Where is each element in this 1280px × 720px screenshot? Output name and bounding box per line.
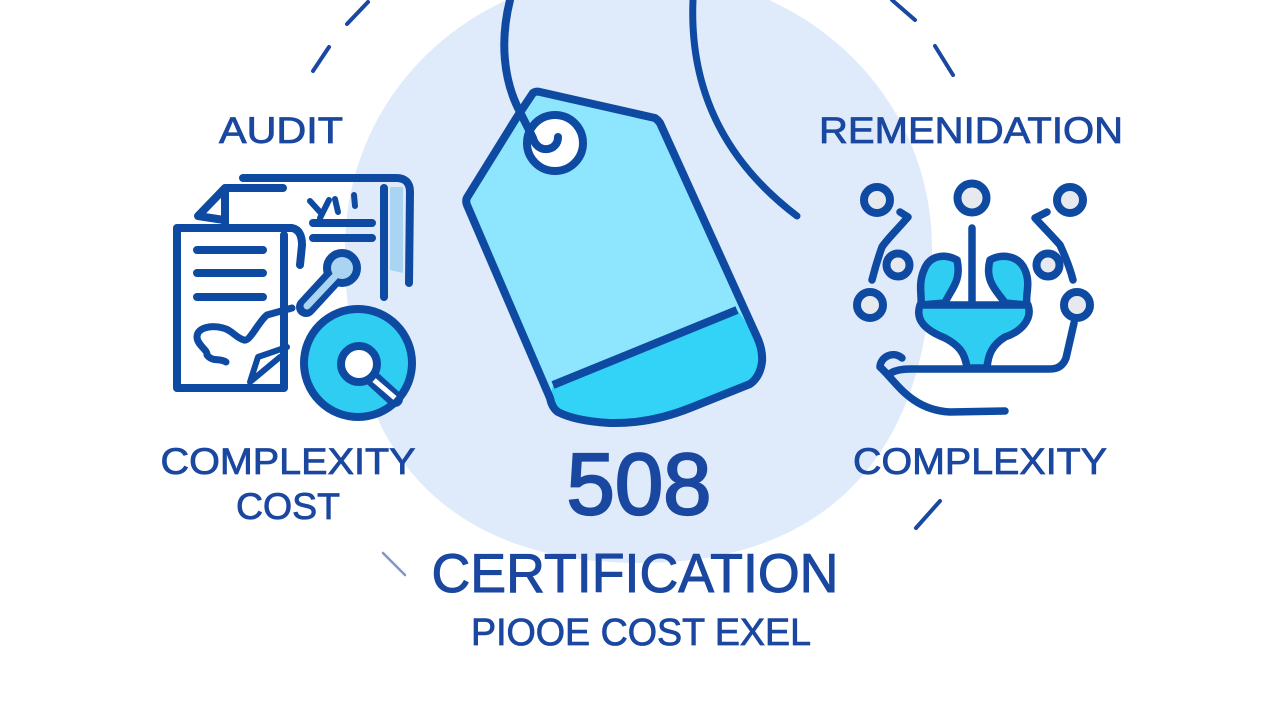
right wrench jaw xyxy=(989,256,1028,305)
back page xyxy=(243,178,410,297)
heading: certification: CERTIFICATION xyxy=(432,542,838,604)
curved cord xyxy=(693,0,797,216)
back page scribble xyxy=(310,195,355,218)
icon: audit documents xyxy=(177,178,410,388)
supporting hand xyxy=(880,355,1005,412)
tag band line xyxy=(553,310,737,385)
tag eyelet xyxy=(527,115,583,171)
wrench base xyxy=(919,305,1029,368)
icon: magnifier disc xyxy=(304,309,412,417)
tag body xyxy=(466,92,762,423)
tag lower band xyxy=(550,310,762,423)
label: complexity cost: COMPLEXITY xyxy=(160,441,416,482)
label: complexity: COMPLEXITY xyxy=(853,441,1107,482)
price tag xyxy=(466,0,762,423)
icon: remediation network xyxy=(857,184,1090,412)
subheading: PIOOE COST EXEL xyxy=(471,612,811,654)
tag string xyxy=(504,0,558,149)
network nodes xyxy=(857,184,1090,318)
label: complexity cost xyxy=(160,441,416,527)
pen nib xyxy=(250,347,287,382)
label: complexity cost: COST xyxy=(236,486,340,527)
back page strip xyxy=(390,187,403,273)
tag outline xyxy=(466,92,762,423)
node links xyxy=(872,212,908,280)
pencil xyxy=(306,254,356,307)
background circle xyxy=(345,0,932,563)
heading: audit: AUDIT xyxy=(219,110,343,151)
signature xyxy=(197,308,292,362)
second page corner xyxy=(198,188,283,226)
dashed ring segments xyxy=(313,0,953,575)
number: 508: 508 xyxy=(566,436,712,533)
heading: remediation: REMENIDATION xyxy=(819,110,1123,151)
front page text xyxy=(197,250,263,297)
front page xyxy=(177,228,302,388)
left wrench jaw xyxy=(921,256,958,305)
back page text xyxy=(313,223,372,238)
